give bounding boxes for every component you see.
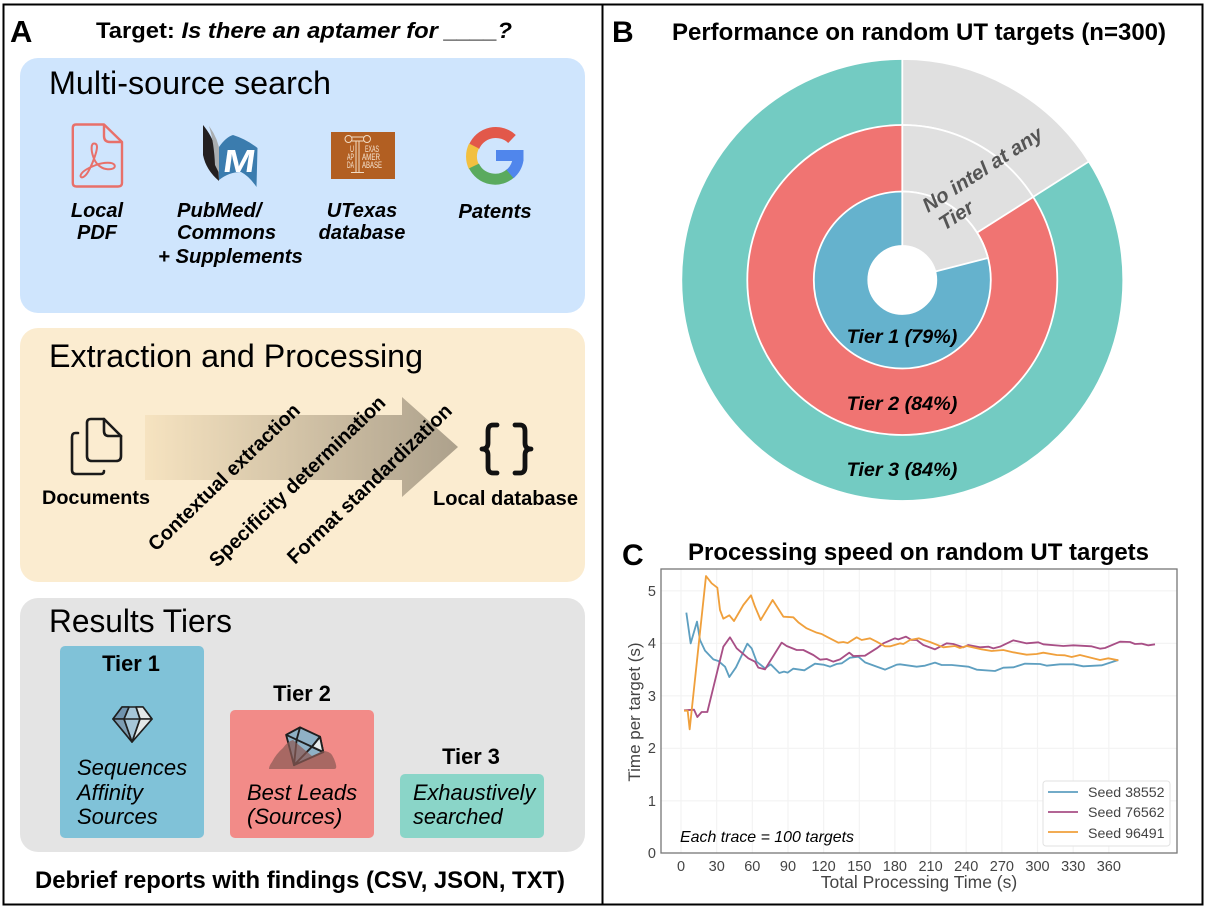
y axis ticks: 4 <box>648 636 656 652</box>
title: processing speed: Processing speed on random UT targets <box>688 539 1149 566</box>
label: contextual extraction: Contextual extraction <box>144 399 305 556</box>
x axis ticks: 330 <box>1061 859 1085 875</box>
label: Local PDF: Local <box>71 200 124 222</box>
x axis ticks: 300 <box>1025 859 1050 875</box>
x axis ticks: 240 <box>954 859 978 875</box>
x axis ticks: 180 <box>883 859 907 875</box>
icon: Google G <box>472 132 524 179</box>
x axis ticks <box>677 859 1121 875</box>
x axis ticks: 90 <box>780 859 796 875</box>
panel: extraction and processing <box>20 328 585 582</box>
label: no intel at any tier: Tier <box>935 196 979 235</box>
y axis ticks: 1 <box>648 794 656 810</box>
x axis title: Total Processing Time (s) <box>821 872 1017 892</box>
panel B: performance sunburst <box>612 16 1166 501</box>
y axis ticks: 5 <box>648 584 656 600</box>
icon: PDF file <box>73 124 122 186</box>
label: no intel at any tier: No intel at any <box>919 123 1047 217</box>
label: UTexas database: database <box>319 222 405 244</box>
label: format standardization: Format standardization <box>283 400 457 569</box>
icon: PubMed book: M <box>221 143 258 179</box>
legend <box>1043 781 1170 846</box>
panel letter B: B <box>612 16 634 49</box>
card: tier 1: Sequences <box>77 755 187 780</box>
card: tier 3: Tier 3 <box>442 744 500 769</box>
x axis ticks: 270 <box>990 859 1014 875</box>
x axis ticks: 30 <box>709 859 725 875</box>
panel: results tiers <box>20 598 585 852</box>
x axis ticks: 210 <box>918 859 943 875</box>
icon: UTexas database logo <box>331 132 395 179</box>
label: tier 1 share: Tier 1 (79%) <box>847 326 957 348</box>
nested donut chart <box>681 59 1123 501</box>
card: tier 3: searched <box>413 804 504 829</box>
panel letter C: C <box>622 539 644 572</box>
heading: extraction and processing: Extraction and Processing <box>49 338 423 374</box>
label: PubMed / Commons + Supplements: + Supplements <box>158 246 303 268</box>
icon: documents <box>72 419 121 474</box>
y axis title: Time per target (s) <box>625 642 644 782</box>
icon: UTexas database logo: DA <box>347 160 354 170</box>
icon: UTexas database logo: ABASE <box>362 160 382 170</box>
label: tier 3 share: Tier 3 (84%) <box>847 459 957 481</box>
card: tier 2: Tier 2 <box>273 681 331 706</box>
panel C: processing speed line chart <box>622 539 1177 892</box>
y axis ticks: 3 <box>648 689 656 705</box>
icon: UTexas database logo: U <box>350 144 354 154</box>
x axis ticks: 360 <box>1097 859 1121 875</box>
card: tier 2: Best Leads <box>247 780 357 805</box>
card: tier 3: Exhaustively <box>413 780 536 805</box>
label: specificity determination: Specificity determination <box>205 392 390 572</box>
footer: debrief reports: Debrief reports with findings (CSV, JSON, TXT) <box>35 868 565 894</box>
card: tier 3 <box>400 744 544 838</box>
x axis ticks: 120 <box>811 859 836 875</box>
heading: results tiers: Results Tiers <box>49 603 232 639</box>
panel letter A: A <box>10 14 32 49</box>
label: Patents: Patents <box>458 201 532 223</box>
label: Documents: Documents <box>42 487 150 509</box>
panel: multi-source search <box>20 58 585 313</box>
card: tier 2: (Sources) <box>247 804 342 829</box>
legend: Seed 76562 <box>1088 805 1165 821</box>
label: tier 2 share: Tier 2 (84%) <box>847 393 957 415</box>
label: local database: Local database <box>433 488 578 510</box>
icon: curly braces database <box>482 425 531 473</box>
y axis ticks <box>648 584 656 862</box>
panel A: aptamer search workflow <box>10 14 585 894</box>
icon: UTexas database logo: AMER <box>362 152 380 162</box>
card: tier 1: Sources <box>77 804 158 829</box>
card: tier 1 <box>60 646 204 838</box>
label: UTexas database: UTexas <box>327 200 397 222</box>
legend: Seed 96491 <box>1088 826 1165 842</box>
icon: UTexas database logo: AP <box>347 152 354 162</box>
icon: UTexas database logo: EXAS <box>365 144 379 154</box>
line traces <box>684 576 1155 729</box>
label: Local PDF: PDF <box>77 222 118 244</box>
legend: Seed 38552 <box>1088 785 1165 801</box>
card: tier 1: Affinity <box>75 780 145 805</box>
x axis ticks: 0 <box>677 859 685 875</box>
annotation: each trace: Each trace = 100 targets <box>680 829 854 846</box>
arrow: processing flow <box>145 397 458 497</box>
y axis ticks: 0 <box>648 846 656 862</box>
title: performance: Performance on random UT targets (n=300) <box>672 19 1166 46</box>
target question heading: Target: Is there an aptamer for ____? <box>96 18 512 43</box>
label: PubMed / Commons + Supplements: Commons <box>177 222 276 244</box>
y axis ticks: 2 <box>648 741 656 757</box>
x axis ticks: 150 <box>847 859 871 875</box>
label: PubMed / Commons + Supplements: PubMed/ <box>177 200 264 222</box>
icon: PubMed book <box>203 125 258 187</box>
card: tier 1: Tier 1 <box>102 651 160 676</box>
icon: diamond in rock <box>269 723 336 774</box>
x axis ticks: 60 <box>744 859 760 875</box>
heading: multi-source search: Multi-source search <box>49 65 331 101</box>
card: tier 2 <box>230 681 374 838</box>
icon: cut diamond <box>113 707 152 742</box>
